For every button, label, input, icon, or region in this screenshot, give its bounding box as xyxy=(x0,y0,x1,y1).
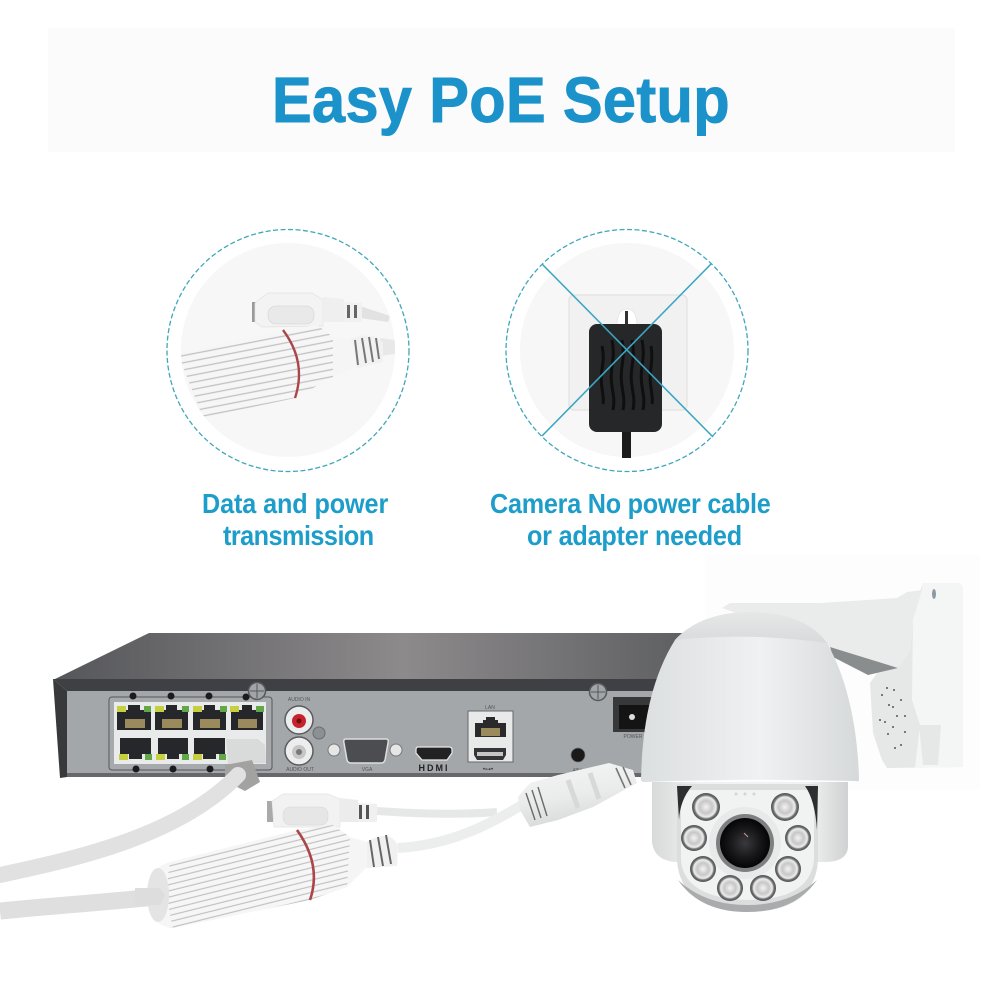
dome xyxy=(641,612,859,782)
network cable with plug xyxy=(0,739,266,875)
icon: crossed power adapter xyxy=(542,264,713,458)
inner circle right xyxy=(520,243,734,457)
caption right: Camera No power cable xyxy=(490,488,771,519)
NVR recorder xyxy=(53,633,690,778)
NVR front xyxy=(53,679,690,691)
caption left: transmission xyxy=(223,520,374,551)
cables to camera and PoE connector xyxy=(0,800,530,911)
camera-side connector small xyxy=(267,794,497,827)
VGA port xyxy=(328,739,402,773)
power jack: 48V xyxy=(573,768,582,774)
waterproof PoE connector xyxy=(135,825,398,928)
caption right: or adapter needed xyxy=(527,520,742,551)
LAN and USB ports: •⊶• xyxy=(483,767,493,773)
dashed circle right xyxy=(506,230,748,472)
PTZ dome camera xyxy=(641,583,963,912)
VGA port: VGA xyxy=(362,767,373,773)
power switch: POWER xyxy=(624,734,643,740)
LAN and USB ports xyxy=(468,705,513,773)
caption right xyxy=(490,488,771,551)
audio ports: AUDIO OUT xyxy=(286,767,314,773)
dashed circle left xyxy=(167,230,409,472)
HDMI port: HDMI xyxy=(418,763,448,773)
PoE port panel xyxy=(109,692,272,772)
audio ports: AUDIO IN xyxy=(288,697,310,703)
audio ports xyxy=(285,697,325,773)
inner circle left xyxy=(181,243,395,457)
inline barrel connector xyxy=(518,763,637,827)
power switch xyxy=(613,697,655,740)
power jack xyxy=(571,748,585,774)
NVR top face xyxy=(53,633,690,680)
LED ring xyxy=(681,793,811,901)
caption left: Data and power xyxy=(202,488,388,519)
panel: no power cable needed xyxy=(490,230,771,551)
wall bracket xyxy=(722,583,963,768)
title panel xyxy=(48,28,955,152)
panel: data and power transmission xyxy=(167,230,409,551)
title: Easy PoE Setup xyxy=(272,65,730,136)
icon: PoE splitter connectors xyxy=(178,293,395,418)
screws xyxy=(248,682,606,700)
caption left xyxy=(202,488,388,551)
HDMI port xyxy=(416,747,452,773)
LAN and USB ports: LAN xyxy=(485,705,495,711)
lens face plate xyxy=(677,784,818,912)
bracket backdrop xyxy=(705,555,980,790)
rear body xyxy=(652,782,848,862)
